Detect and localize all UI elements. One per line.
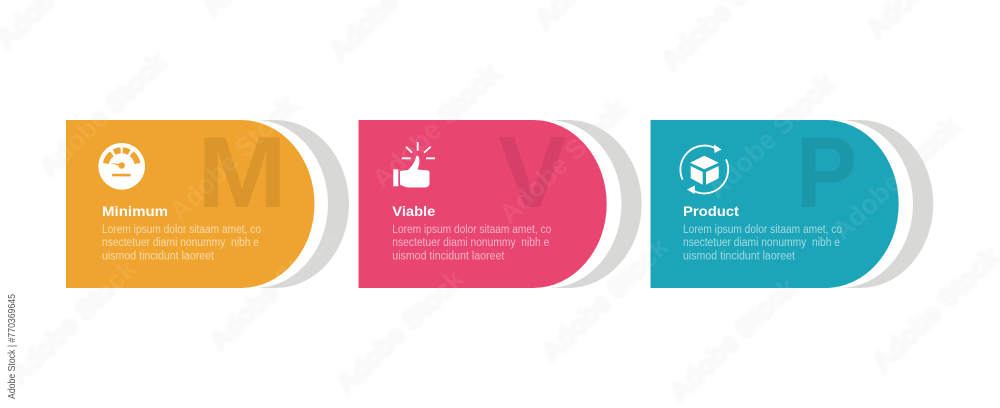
watermark tint layer over cards: Adobe Stock bbox=[330, 263, 470, 399]
gray back layer bbox=[492, 120, 642, 288]
watermark halo layer on white background: Adobe Stock bbox=[535, 231, 675, 367]
heading: product: Product bbox=[683, 204, 740, 219]
watermark halo layer on white background: Adobe Stock bbox=[663, 271, 803, 407]
icon: thumbs up bbox=[393, 142, 435, 188]
gray back layer bbox=[784, 120, 933, 288]
watermark halo layer on white background: Adobe Stock bbox=[33, 46, 173, 182]
watermark halo layer on white background: Adobe Stock bbox=[366, 58, 506, 194]
white middle layer bbox=[200, 120, 328, 288]
large letter P: P bbox=[796, 117, 857, 229]
stock id side label: Adobe Stock | #770369645 bbox=[6, 294, 18, 399]
white middle layer bbox=[492, 120, 622, 288]
watermark tint layer over cards: Adobe Stock bbox=[663, 271, 803, 407]
watermark tint layer over cards: Adobe Stock bbox=[366, 58, 506, 194]
panel: viable bbox=[358, 117, 642, 288]
text block: product description: nsectetuer diami nonummy nibh e bbox=[683, 237, 840, 249]
watermark tint layer over cards: Adobe Stock bbox=[826, 110, 966, 246]
large letter M: M bbox=[197, 117, 287, 229]
heading: viable: Viable bbox=[392, 204, 436, 219]
watermark halo layer on white background: Adobe Stock bbox=[330, 263, 470, 399]
text block: minimum description bbox=[102, 224, 261, 262]
text block: product description bbox=[683, 224, 842, 262]
watermark tint layer over cards: Adobe Stock bbox=[203, 220, 343, 356]
text block: minimum description: uismod tincidunt laoreet bbox=[102, 250, 215, 262]
text block: minimum description: nsectetuer diami nonummy nibh e bbox=[102, 237, 259, 249]
text block: product description: Lorem ipsum dolor sitaam amet, co bbox=[683, 224, 842, 236]
large letter V: V bbox=[498, 117, 567, 229]
panel: minimum bbox=[66, 117, 349, 288]
watermark halo layer on white background: Adobe Stock bbox=[3, 253, 143, 389]
panel: product bbox=[650, 117, 933, 288]
text block: viable description: uismod tincidunt laoreet bbox=[392, 250, 505, 262]
heading: minimum: Minimum bbox=[102, 204, 168, 219]
watermark halo layer on white background: Adobe Stock bbox=[163, 90, 303, 226]
watermark tint layer over cards: Adobe Stock bbox=[535, 231, 675, 367]
watermark halo layer on white background: Adobe Stock bbox=[826, 110, 966, 246]
watermark tint layer over cards: Adobe Stock bbox=[163, 90, 303, 226]
watermark tint layer over cards: Adobe Stock bbox=[701, 68, 841, 204]
icon: speedometer bbox=[98, 143, 145, 190]
watermark tint layer over cards: Adobe Stock bbox=[3, 253, 143, 389]
gray back layer bbox=[200, 120, 349, 288]
text block: viable description bbox=[392, 224, 551, 262]
text block: viable description: Lorem ipsum dolor sitaam amet, co bbox=[392, 224, 551, 236]
watermark tint layer over cards: Adobe Stock bbox=[33, 46, 173, 182]
icon: box with cycle arrows bbox=[680, 144, 728, 194]
teal card bbox=[650, 120, 899, 288]
text block: product description: uismod tincidunt laoreet bbox=[683, 250, 796, 262]
white middle layer bbox=[784, 120, 913, 288]
text block: minimum description: Lorem ipsum dolor sitaam amet, co bbox=[102, 224, 261, 236]
watermark halo layer on white background: Adobe Stock bbox=[701, 68, 841, 204]
watermark halo layer on white background: Adobe Stock bbox=[203, 220, 343, 356]
watermark halo layer on white background: Adobe Stock bbox=[493, 93, 633, 229]
text block: viable description: nsectetuer diami nonummy nibh e bbox=[392, 237, 549, 249]
pink card bbox=[358, 120, 607, 288]
watermark tint layer over cards: Adobe Stock bbox=[493, 93, 633, 229]
orange card bbox=[66, 120, 314, 288]
